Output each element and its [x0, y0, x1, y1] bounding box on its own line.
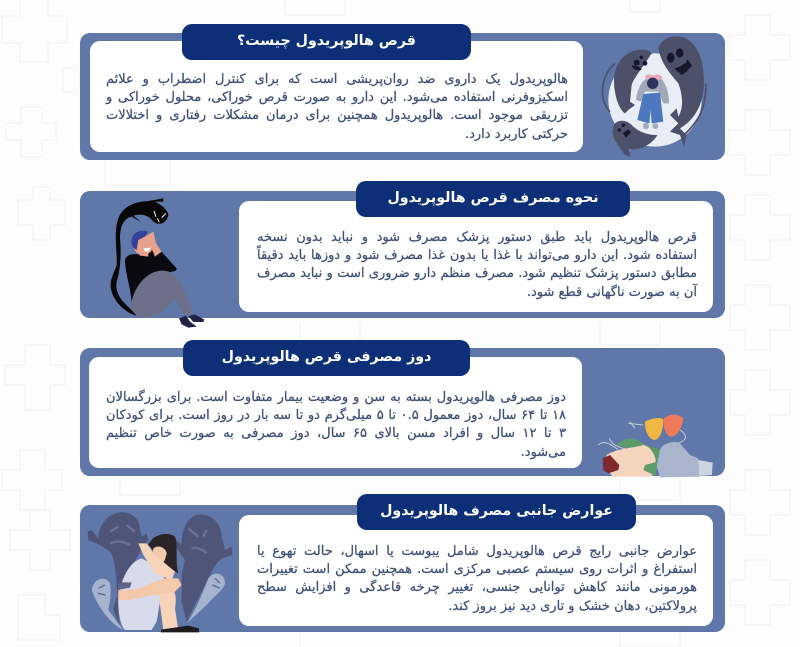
- text block: how to use: قرص هالوپریدول باید طبق دستور پزشک مصرف شود و نباید بدون نسخه: [257, 230, 697, 245]
- text block: what is haloperidol: [105, 72, 568, 142]
- text block: dosage: [106, 389, 566, 460]
- heading: side effects: [357, 494, 636, 530]
- heading: dosage: [183, 340, 470, 376]
- text block: dosage: دوز مصرفی هالوپریدول بسته به سن و وضعیت بیمار متفاوت است. برای بزرگسالان: [106, 390, 566, 405]
- text block: side effects: پرولاکتین، دهان خشک و تاری دید نیز بروز کند.: [448, 599, 697, 614]
- text block: side effects: استفراغ و اثرات روی سیستم عصبی مرکزی است. همچنین ممکن است تغییرات: [257, 562, 697, 577]
- text block: side effects: هورمونی مانند کاهش توانایی جنسی، تغییر چرخه قاعدگی و افزایش سطح: [257, 580, 697, 595]
- heading: what is haloperidol: قرص هالوپریدول چیست؟: [237, 33, 416, 49]
- text block: how to use: مطابق دستور پزشک تنظیم شود. مصرف منظم دارو ضروری است و نباید مصرف: [257, 266, 697, 281]
- text card: what is haloperidol: [90, 41, 583, 152]
- text block: dosage: ۳ تا ۱۲ سال و افراد مسن بالای ۶۵ سال، دوز مصرفی به صورت خاص تنظیم: [106, 426, 566, 441]
- text block: how to use: [256, 230, 698, 300]
- heading: dosage: دوز مصرفی قرص هالوپریدول: [222, 349, 431, 365]
- text block: what is haloperidol: هالوپریدول یک داروی ضد روان‌پریشی است که برای کنترل اضطراب و علائم: [106, 72, 568, 87]
- heading: side effects: عوارض جانبی مصرف هالوپریدول: [380, 503, 613, 519]
- text card: how to use: [239, 201, 713, 312]
- heading: how to use: [356, 181, 630, 217]
- heading: what is haloperidol: [182, 24, 471, 60]
- text block: side effects: [257, 544, 697, 614]
- heading: how to use: نحوه مصرف قرص هالوپریدول: [387, 190, 599, 206]
- text block: what is haloperidol: تزریقی موجود است. هالوپریدول همچنین برای درمان مشکلات رفتاری و اختلالات: [106, 108, 568, 123]
- text block: what is haloperidol: حرکتی کاربرد دارد.: [465, 127, 568, 142]
- text block: how to use: آن به صورت ناگهانی قطع شود.: [527, 285, 697, 300]
- text block: side effects: عوارض جانبی رایج قرص هالوپریدول شامل یبوست یا اسهال، حالت تهوع یا: [257, 544, 697, 559]
- panel: side effects: [80, 505, 725, 632]
- text card: dosage: [89, 357, 582, 468]
- text block: how to use: استفاده شود. این دارو می‌تواند با غذا یا بدون غذا مصرف شود و دوزها باید دقیقاً: [257, 248, 697, 263]
- text block: what is haloperidol: اسکیزوفرنی استفاده می‌شود. این دارو به صورت قرص خوراکی، محلول خوراکی و: [106, 90, 568, 105]
- panel: dosage: [80, 348, 725, 476]
- text block: dosage: می‌شود.: [521, 445, 566, 460]
- panel: what is haloperidol: [80, 33, 725, 160]
- text block: dosage: ۱۸ تا ۶۴ سال، دوز معمول ۰.۵ تا ۵ میلی‌گرم دو تا سه بار در روز است. برای کودکان: [106, 408, 566, 423]
- text card: side effects: [239, 515, 713, 626]
- panel: how to use: [80, 191, 725, 318]
